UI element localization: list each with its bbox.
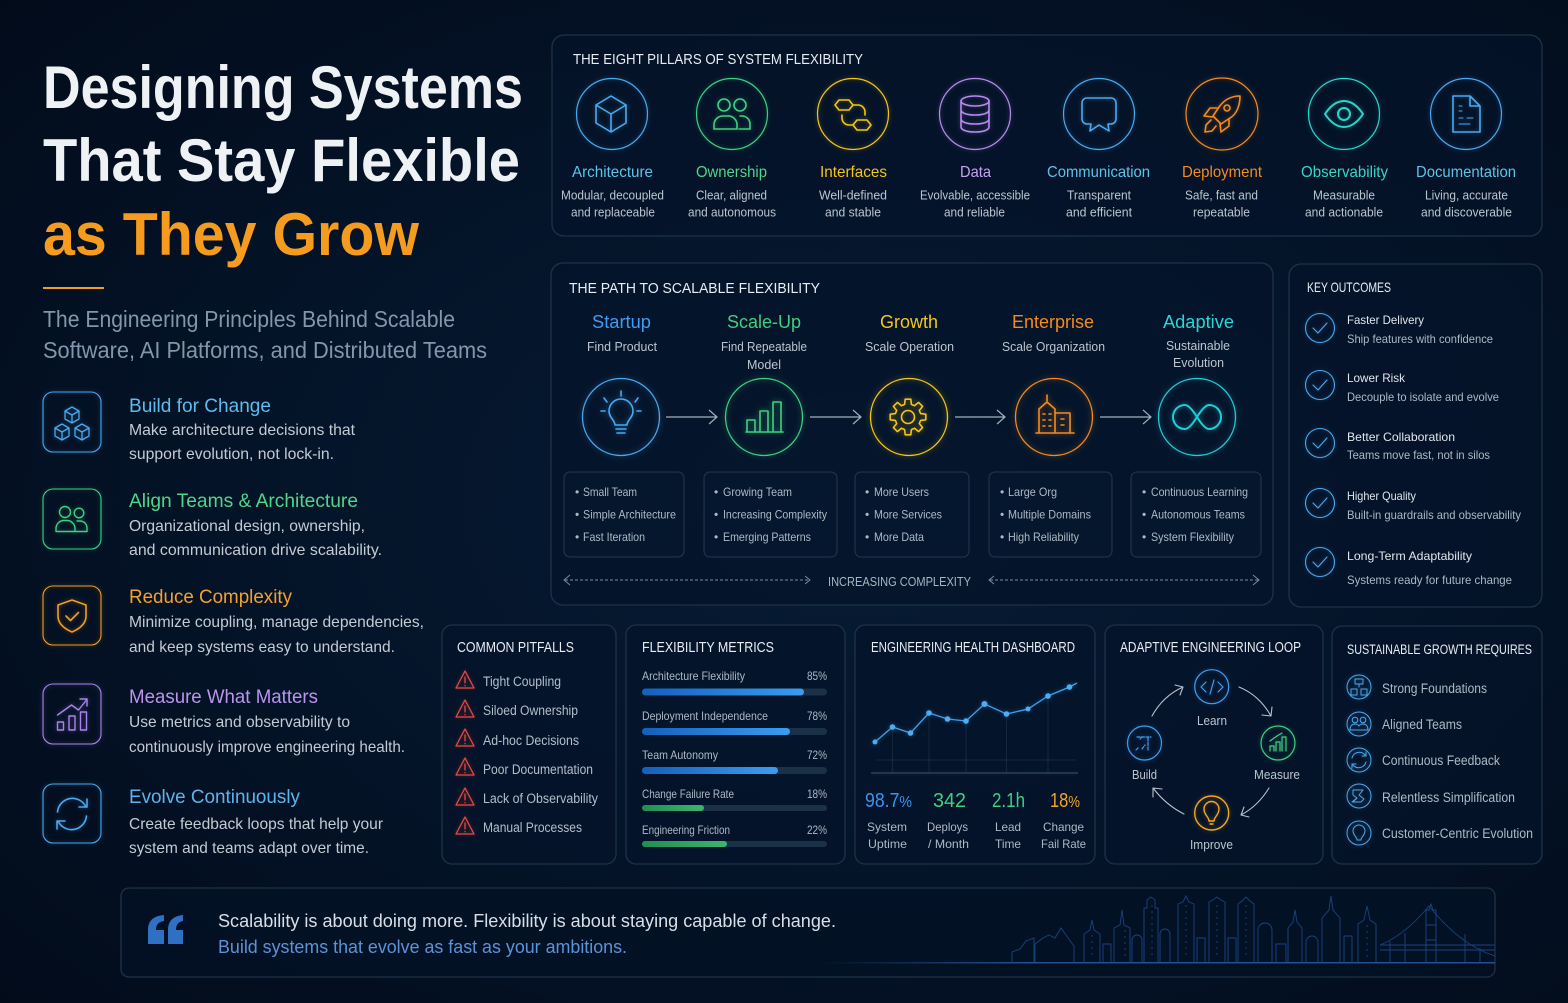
box: startup traits: Simple Architecture xyxy=(583,508,676,522)
stage: startup: Startup xyxy=(592,312,651,332)
icon: rising chart xyxy=(43,684,101,744)
pillar: interfaces: Interfaces xyxy=(820,164,887,181)
outcome: higher quality: Higher Quality xyxy=(1347,489,1416,503)
outcome: faster delivery xyxy=(1306,313,1493,346)
metric: engineering friction: Engineering Friction xyxy=(642,823,730,837)
pitfall list: Ad-hoc Decisions xyxy=(483,733,579,748)
panel: key outcomes xyxy=(1289,264,1542,607)
metric: architecture flexibility: 85% xyxy=(807,669,827,683)
quote text: Build systems that evolve as fast as your ambitions. xyxy=(218,937,627,957)
pillar: communication xyxy=(1047,78,1150,220)
arrow xyxy=(666,410,717,424)
pillar: interfaces xyxy=(818,78,888,220)
box: scale-up traits: • xyxy=(714,530,718,544)
outcome: higher quality xyxy=(1306,488,1521,522)
stat: change fail rate xyxy=(1041,790,1086,851)
pitfall list: Lack of Observability xyxy=(483,791,598,806)
principle: reduce complexity: and keep systems easy to understand. xyxy=(129,639,395,656)
outcome: better collaboration: Teams move fast, not in silos xyxy=(1347,448,1490,462)
heading: pitfalls: COMMON PITFALLS xyxy=(457,640,574,656)
pillar: ownership: and autonomous xyxy=(688,206,776,220)
arrow xyxy=(810,410,861,424)
stat: deploys per month: Deploys xyxy=(927,820,968,834)
pillar: architecture: Architecture xyxy=(572,164,653,181)
pillar: observability xyxy=(1301,78,1388,220)
pillar: architecture: and replaceable xyxy=(571,206,655,220)
box: adaptive traits xyxy=(1131,472,1261,557)
pillar: communication: Communication xyxy=(1047,164,1150,181)
line chart xyxy=(871,683,1078,773)
heading: key outcomes: KEY OUTCOMES xyxy=(1307,279,1391,295)
pitfall list: Siloed Ownership xyxy=(483,703,578,718)
icon: shield xyxy=(43,586,101,645)
box: enterprise traits: • xyxy=(1000,530,1004,544)
heading: dashboard: ENGINEERING HEALTH DASHBOARD xyxy=(871,640,1075,656)
box: startup traits: Small Team xyxy=(583,485,637,499)
item: aligned teams: Aligned Teams xyxy=(1382,717,1462,732)
pillar: architecture: Modular, decoupled xyxy=(561,188,664,202)
metric: change failure rate xyxy=(642,787,827,811)
item: relentless simplification xyxy=(1347,784,1515,808)
box: adaptive traits: • xyxy=(1142,530,1146,544)
box: adaptive traits: • xyxy=(1142,485,1146,499)
stat: lead time xyxy=(992,790,1025,851)
heading: eight pillars: THE EIGHT PILLARS OF SYSTEM FLEXIBILITY xyxy=(573,52,863,68)
pillar: ownership: Clear, aligned xyxy=(696,188,767,202)
pillar: deployment: Deployment xyxy=(1182,164,1263,181)
principle: align teams: Organizational design, ownership, xyxy=(129,518,365,535)
outcome: lower risk: Lower Risk xyxy=(1347,371,1406,385)
stat: change fail rate: 18% xyxy=(1050,790,1080,812)
pillar: interfaces: and stable xyxy=(825,206,881,220)
pillar: data: Evolvable, accessible xyxy=(920,188,1030,202)
principle: align teams: Align Teams & Architecture xyxy=(129,490,358,512)
stage: scale-up: Find Repeatable xyxy=(721,340,807,354)
metric: engineering friction: 22% xyxy=(807,823,827,837)
pillar: data: Data xyxy=(960,164,991,181)
box: startup traits: Fast Iteration xyxy=(583,530,645,544)
loop arrows xyxy=(1152,685,1272,817)
item: strong foundations: Strong Foundations xyxy=(1382,681,1487,696)
title: That Stay Flexible xyxy=(43,127,520,194)
box: growth traits: • xyxy=(865,485,869,499)
panel: engineering health dashboard xyxy=(855,625,1095,864)
panel: sustainable growth requires xyxy=(1332,626,1542,864)
pitfall list: Poor Documentation xyxy=(483,762,593,777)
item: strong foundations xyxy=(1347,675,1487,699)
item: customer-centric evolution: Customer-Centric Evolution xyxy=(1382,826,1533,841)
node: learn xyxy=(1195,670,1229,728)
box: growth traits: More Services xyxy=(874,508,942,522)
icon: cubes xyxy=(43,392,101,452)
metric: engineering friction xyxy=(642,823,827,847)
icon: quote mark xyxy=(148,915,183,944)
outcome: faster delivery: Faster Delivery xyxy=(1347,313,1424,327)
stat: system uptime: 98.7% xyxy=(865,790,912,812)
stat: change fail rate: Change xyxy=(1043,820,1084,834)
panel: flexibility metrics xyxy=(626,625,845,864)
box: growth traits: More Users xyxy=(874,485,929,499)
stage: growth xyxy=(865,312,954,456)
node: improve: Improve xyxy=(1190,838,1233,852)
box: enterprise traits xyxy=(989,472,1112,557)
metric: deployment independence: 78% xyxy=(807,709,827,723)
principle: measure what matters: continuously improve engineering health. xyxy=(129,739,405,756)
box: scale-up traits: Emerging Patterns xyxy=(723,530,811,544)
principle: measure what matters: Use metrics and observability to xyxy=(129,714,350,731)
pillar: interfaces: Well-defined xyxy=(819,188,887,202)
principle: measure what matters: Measure What Matters xyxy=(129,686,318,708)
box: growth traits: • xyxy=(865,530,869,544)
stage: adaptive: Adaptive xyxy=(1163,312,1234,332)
stage: enterprise xyxy=(1002,312,1105,456)
panel: path to scalable flexibility xyxy=(551,263,1273,605)
outcome: lower risk xyxy=(1306,370,1499,404)
icon: refresh arrows xyxy=(43,784,101,843)
item: aligned teams xyxy=(1347,712,1462,736)
stage: startup: Find Product xyxy=(587,340,658,354)
box: enterprise traits: High Reliability xyxy=(1008,530,1079,544)
panel: adaptive engineering loop xyxy=(1105,625,1323,864)
box: adaptive traits: System Flexibility xyxy=(1151,530,1234,544)
pitfall list xyxy=(483,674,598,835)
pillar: observability: Observability xyxy=(1301,164,1388,181)
box: startup traits: • xyxy=(575,485,579,499)
principle: align teams xyxy=(43,489,382,559)
subtitle: Software, AI Platforms, and Distributed Teams xyxy=(43,337,487,363)
pitfall list: Manual Processes xyxy=(483,820,582,835)
stage: scale-up xyxy=(721,312,807,456)
subtitle: The Engineering Principles Behind Scalable xyxy=(43,306,455,332)
principle: build for change: support evolution, not lock-in. xyxy=(129,446,334,463)
principle: reduce complexity xyxy=(43,586,424,656)
principle: reduce complexity: Minimize coupling, manage dependencies, xyxy=(129,614,424,631)
box: enterprise traits: • xyxy=(1000,508,1004,522)
box: growth traits xyxy=(855,472,969,557)
pillar: communication: and efficient xyxy=(1066,206,1133,220)
node: improve xyxy=(1190,796,1233,852)
principle: build for change: Make architecture decisions that xyxy=(129,422,356,439)
metric: team autonomy xyxy=(642,748,827,774)
stat: system uptime xyxy=(865,790,912,851)
title xyxy=(43,54,523,268)
item: relentless simplification: Relentless Simplification xyxy=(1382,790,1515,805)
heading: metrics: FLEXIBILITY METRICS xyxy=(642,640,774,656)
stage: growth: Growth xyxy=(880,312,938,332)
pillar: documentation: Documentation xyxy=(1416,164,1516,181)
box: scale-up traits: Growing Team xyxy=(723,485,792,499)
pillar: data xyxy=(920,78,1030,220)
box: growth traits: • xyxy=(865,508,869,522)
increasing complexity axis xyxy=(564,575,1259,589)
metric: architecture flexibility xyxy=(642,669,827,696)
stat: lead time: Lead xyxy=(995,820,1021,834)
outcome: higher quality: Built-in guardrails and observability xyxy=(1347,508,1521,522)
stat: deploys per month: / Month xyxy=(928,837,969,851)
pillar: observability: and actionable xyxy=(1305,206,1383,220)
pillar: ownership xyxy=(688,78,776,220)
metric: change failure rate: 18% xyxy=(807,787,827,801)
principle: align teams: and communication drive scalability. xyxy=(129,542,382,559)
pillar: deployment: repeatable xyxy=(1193,206,1250,220)
skyline illustration xyxy=(820,896,1495,964)
stat: lead time: Time xyxy=(995,837,1021,851)
box: scale-up traits: • xyxy=(714,508,718,522)
pitfall list: Tight Coupling xyxy=(483,674,561,689)
principle: evolve continuously: system and teams adapt over time. xyxy=(129,840,369,857)
stage: enterprise: Enterprise xyxy=(1012,312,1094,332)
warning icons xyxy=(456,671,474,834)
pillar: ownership: Ownership xyxy=(696,164,767,181)
stat: lead time: 2.1h xyxy=(992,790,1025,812)
pillar: documentation xyxy=(1416,78,1516,220)
principle: build for change: Build for Change xyxy=(129,395,271,417)
box: scale-up traits xyxy=(704,472,837,557)
box: startup traits xyxy=(564,472,684,557)
principle: evolve continuously: Evolve Continuously xyxy=(129,786,300,808)
quote text xyxy=(218,911,836,957)
stat: system uptime: Uptime xyxy=(868,837,907,851)
pillar: documentation: Living, accurate xyxy=(1425,188,1508,202)
metric: deployment independence xyxy=(642,709,827,735)
metric: architecture flexibility: Architecture Flexibility xyxy=(642,669,745,683)
node: build xyxy=(1128,726,1162,782)
stat: change fail rate: Fail Rate xyxy=(1041,837,1086,851)
icon: people xyxy=(43,489,101,549)
quote text: Scalability is about doing more. Flexibility is about staying capable of change. xyxy=(218,911,836,931)
outcome: lower risk: Decouple to isolate and evolve xyxy=(1347,390,1499,404)
stat: deploys per month: 342 xyxy=(933,790,966,812)
box: adaptive traits: Continuous Learning xyxy=(1151,485,1248,499)
principle: evolve continuously xyxy=(43,784,384,857)
stage: startup xyxy=(582,312,660,456)
box: adaptive traits: • xyxy=(1142,508,1146,522)
subtitle xyxy=(43,306,487,363)
stage: enterprise: Scale Organization xyxy=(1002,340,1105,354)
principle: build for change xyxy=(43,392,356,463)
box: startup traits: • xyxy=(575,530,579,544)
principle: evolve continuously: Create feedback loops that help your xyxy=(129,816,384,833)
outcome: faster delivery: Ship features with confidence xyxy=(1347,332,1493,346)
pillar: documentation: and discoverable xyxy=(1421,206,1512,220)
box: enterprise traits: • xyxy=(1000,485,1004,499)
metric: deployment independence: Deployment Independence xyxy=(642,709,768,723)
panel: common pitfalls xyxy=(442,625,616,864)
stage: adaptive xyxy=(1158,312,1236,456)
stat: system uptime: System xyxy=(867,820,907,834)
metric: team autonomy: 72% xyxy=(807,748,827,762)
outcome: long-term adaptability: Systems ready for future change xyxy=(1347,573,1512,587)
metric: team autonomy: Team Autonomy xyxy=(642,748,718,762)
node: learn: Learn xyxy=(1197,714,1227,728)
node: measure xyxy=(1254,726,1300,782)
item: continuous feedback: Continuous Feedback xyxy=(1382,753,1500,768)
stage: scale-up: Scale-Up xyxy=(727,312,801,332)
outcome: long-term adaptability: Long-Term Adaptability xyxy=(1347,549,1472,563)
box: growth traits: More Data xyxy=(874,530,924,544)
outcome: better collaboration xyxy=(1306,428,1490,462)
heading: loop: ADAPTIVE ENGINEERING LOOP xyxy=(1120,640,1301,656)
box: enterprise traits: Multiple Domains xyxy=(1008,508,1091,522)
principle: measure what matters xyxy=(43,684,405,756)
pillar: data: and reliable xyxy=(944,206,1005,220)
stage: adaptive: Sustainable xyxy=(1166,339,1230,353)
pillar: deployment: Safe, fast and xyxy=(1185,188,1258,202)
outcome: better collaboration: Better Collaboration xyxy=(1347,430,1455,444)
box: enterprise traits: Large Org xyxy=(1008,485,1057,499)
pillar: communication: Transparent xyxy=(1067,188,1131,202)
box: startup traits: • xyxy=(575,508,579,522)
box: scale-up traits: • xyxy=(714,485,718,499)
stat: deploys per month xyxy=(927,790,969,851)
pillar: deployment xyxy=(1182,78,1263,220)
accent rule xyxy=(43,287,104,289)
title: as They Grow xyxy=(43,201,419,268)
pillar: observability: Measurable xyxy=(1313,188,1375,202)
pillar: architecture xyxy=(561,78,664,220)
arrow xyxy=(1100,410,1151,424)
arrow xyxy=(955,410,1005,424)
box: scale-up traits: Increasing Complexity xyxy=(723,508,827,522)
stage: scale-up: Model xyxy=(747,358,781,372)
outcome: long-term adaptability xyxy=(1306,548,1512,587)
stage: adaptive: Evolution xyxy=(1173,356,1224,370)
principle: reduce complexity: Reduce Complexity xyxy=(129,586,292,608)
item: customer-centric evolution xyxy=(1347,821,1533,845)
panel: closing quote xyxy=(121,888,1495,977)
stage: growth: Scale Operation xyxy=(865,340,954,354)
panel: eight pillars xyxy=(552,35,1542,236)
increasing complexity axis: INCREASING COMPLEXITY xyxy=(828,575,972,589)
item: continuous feedback xyxy=(1347,748,1500,772)
metric: change failure rate: Change Failure Rate xyxy=(642,787,734,801)
node: build: Build xyxy=(1132,768,1157,782)
node: measure: Measure xyxy=(1254,768,1300,782)
heading: path: THE PATH TO SCALABLE FLEXIBILITY xyxy=(569,281,820,297)
box: adaptive traits: Autonomous Teams xyxy=(1151,508,1245,522)
title: Designing Systems xyxy=(43,54,523,121)
